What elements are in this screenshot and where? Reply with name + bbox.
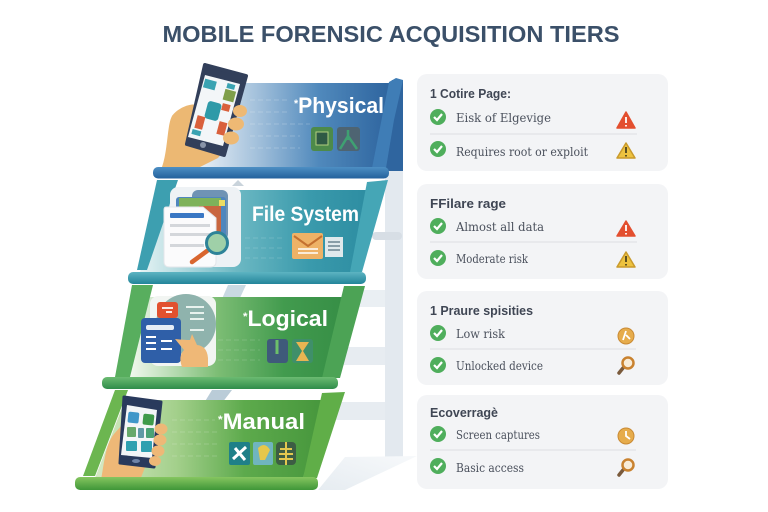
heading: 1 Praure spisities: [430, 304, 533, 318]
label: Physical: *: [294, 98, 299, 110]
tier: Physical: [153, 65, 403, 178]
icon: chip tiles: [311, 127, 360, 151]
check icon: [430, 426, 446, 442]
shelf: Logical: [102, 377, 338, 389]
magnifier icon: [619, 460, 634, 475]
ladder background structure: [204, 170, 417, 490]
check icon: [430, 325, 446, 341]
panel: logical details: [417, 291, 668, 385]
icon: envelope and note: [292, 233, 343, 259]
label: Physical: Physical: [298, 93, 384, 118]
item text: Screen captures: [456, 428, 540, 442]
heading: FFilare rage: [430, 197, 506, 211]
warning mark: [625, 117, 627, 126]
item text: Requires root or exploit: [456, 145, 588, 159]
panel: manual details: [417, 395, 668, 489]
item text: Moderate risk: [456, 252, 529, 266]
label: Manual: *: [218, 414, 223, 426]
warning icon red: [617, 112, 635, 128]
shelf: Manual: [75, 477, 318, 490]
item text: Unlocked device: [456, 359, 543, 373]
warning icon yellow: [617, 252, 635, 267]
label: Logical: Logical: [247, 306, 328, 331]
item text: Low risk: [456, 327, 506, 341]
warning mark: [625, 256, 627, 266]
tier: Manual: [75, 390, 345, 490]
shelf: Physical: [153, 167, 389, 178]
warning mark: [625, 225, 627, 234]
panel: file system details: [417, 184, 668, 279]
item text: Almost all data: [455, 220, 544, 234]
icon: app cards and hand: [141, 294, 216, 367]
item text: Basic access: [456, 461, 524, 475]
check icon: [430, 109, 446, 125]
clock coin icon: [618, 328, 634, 344]
label: Manual: Manual: [223, 409, 305, 434]
warning icon yellow: [617, 143, 635, 158]
icon: hand holding phone: [101, 397, 168, 480]
magnifier icon: [619, 358, 634, 373]
tier: Logical: [102, 285, 365, 389]
warning icon red: [617, 221, 635, 236]
heading: 1 Cotire Page:: [430, 87, 511, 101]
warning mark: [625, 147, 627, 156]
check icon: [430, 250, 446, 266]
icon: documents and magnifier: [164, 187, 241, 267]
icon: logical tiles: [267, 339, 313, 363]
check icon: [430, 218, 446, 234]
item text: Eisk of Elgevige: [456, 111, 551, 125]
title: MOBILE FORENSIC ACQUISITION TIERS: [162, 21, 620, 47]
shelf: File System: [128, 272, 366, 284]
check icon: [430, 357, 446, 373]
label: File System: File System: [252, 203, 359, 226]
tier: File System: [128, 180, 388, 284]
icon: manual tiles: [229, 442, 296, 465]
heading: Ecoverragè: [430, 406, 498, 420]
check icon: [430, 141, 446, 157]
panel: physical details: [417, 74, 668, 171]
check icon: [430, 458, 446, 474]
icon: hand holding phone: [162, 65, 247, 167]
clock coin icon: [618, 428, 634, 444]
label: Logical: *: [243, 311, 248, 323]
